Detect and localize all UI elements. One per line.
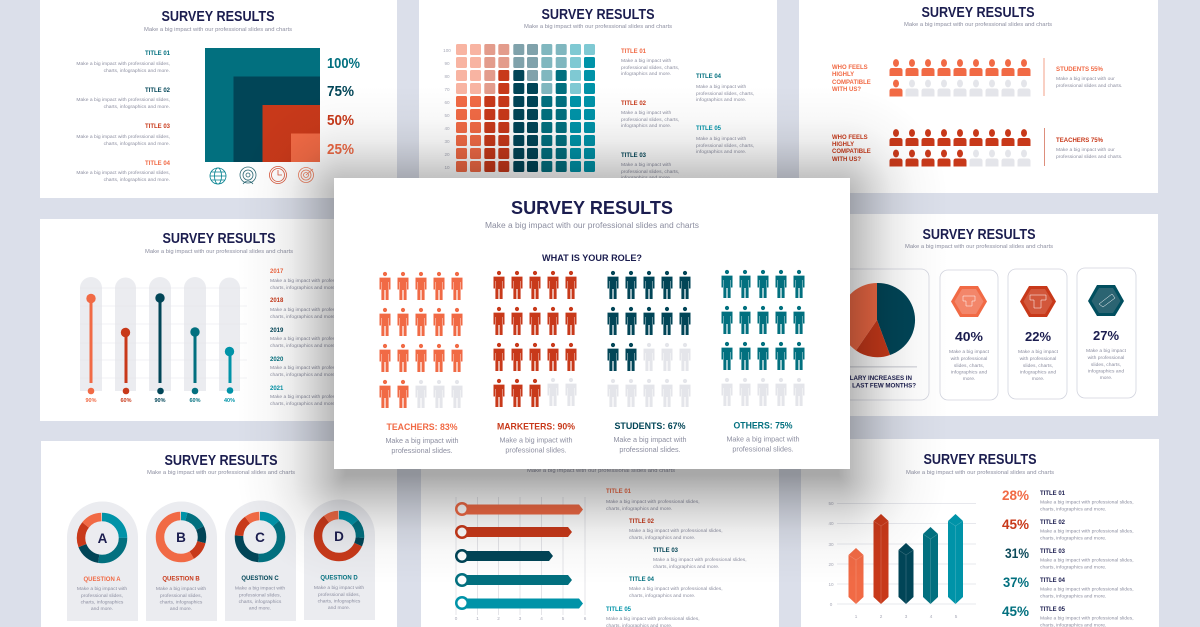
- value labels: lollipop chart: 60%: [189, 398, 201, 404]
- percent labels: column chart: 31%: [1005, 545, 1029, 561]
- arch card: question C: charts, infographics: [239, 599, 282, 605]
- subtitle: compatibility slide: Make a big impact with our professional slides and charts: [904, 22, 1052, 28]
- text list: column chart titles: TITLE 05: [1040, 607, 1066, 613]
- axis labels: waffle chart: 10: [444, 165, 450, 170]
- text list: staggered titles 01 to 05: TITLE 01: [606, 489, 632, 495]
- text list: titles 01 to 04: Make a big impact with professional slides,: [76, 61, 170, 67]
- chart: horizontal arrow bars: 0: [455, 616, 458, 621]
- arch card: question D: professional slides,: [318, 592, 360, 598]
- chart: horizontal arrow bars: 4: [540, 616, 543, 621]
- text list: titles 01 to 05: Make a big impact with: [621, 110, 671, 116]
- chart: hexagonal columns: 5: [955, 614, 958, 619]
- caption: students: [613, 421, 687, 454]
- chart: hexagonal columns: 30: [828, 542, 834, 547]
- text list: titles 01 to 05: infographics and more.: [696, 97, 746, 103]
- question label: teachers: COMPATIBLE: [832, 149, 871, 155]
- caption: students: professional slides.: [619, 445, 681, 454]
- text list: staggered titles 01 to 05: TITLE 05: [606, 607, 632, 613]
- arch card: question B: charts, infographics: [160, 600, 203, 606]
- text list: column chart titles: Make a big impact with professional slides,: [1040, 500, 1134, 506]
- callout: students 55%: STUDENTS 55%: [1056, 67, 1104, 73]
- chart: waffle grid: [456, 44, 595, 172]
- text list: years 2017 to 2021: charts, infographics and more.: [270, 343, 336, 349]
- text list: column chart titles: charts, infographics and more.: [1040, 594, 1106, 600]
- text list: staggered titles 01 to 05: Make a big impact with professional slides,: [653, 557, 747, 563]
- text list: staggered titles 01 to 05: charts, infographics and more.: [653, 564, 719, 570]
- panel: compatibility pictogram slide: [799, 0, 1158, 193]
- axis labels: waffle chart: 70: [444, 87, 450, 92]
- text list: titles 01 to 05: professional slides, charts,: [696, 143, 754, 149]
- arch card: question C: and more.: [249, 606, 271, 612]
- card: 27%: infographics and: [1088, 368, 1124, 374]
- panel: nested squares slide: [40, 0, 397, 198]
- axis labels: waffle chart: 50: [444, 113, 450, 118]
- heading: column chart slide: SURVEY RESULTS: [924, 452, 1037, 468]
- subtitle: hexagon cards slide: Make a big impact with our professional slides and charts: [905, 244, 1053, 250]
- text list: staggered titles 01 to 05: Make a big impact with professional slides,: [606, 499, 700, 505]
- arch card: question B: and more.: [170, 606, 192, 612]
- text list: column chart titles: TITLE 02: [1040, 520, 1066, 526]
- card: 27%: Make a big impact: [1086, 348, 1127, 354]
- pictogram: teachers 75%: [890, 129, 1030, 166]
- caption: marketers: professional slides.: [505, 446, 567, 454]
- callout: students 55%: Make a big impact with our: [1056, 76, 1115, 82]
- text list: titles 01 to 05: Make a big impact with: [621, 58, 671, 64]
- value labels: lollipop chart: 90%: [85, 398, 97, 404]
- pictogram: students 67%: [608, 271, 690, 407]
- axis labels: waffle chart: 40: [444, 126, 450, 131]
- caption: marketers: Make a big impact with: [499, 436, 573, 444]
- arch card: question A: and more.: [91, 606, 113, 612]
- chart: horizontal arrow bars: 1: [476, 616, 479, 621]
- callout: students 55%: professional slides and charts.: [1056, 83, 1122, 89]
- text list: staggered titles 01 to 05: TITLE 02: [629, 519, 655, 525]
- card: 27%: with professional: [1088, 355, 1124, 361]
- caption: teachers: [385, 422, 459, 455]
- axis labels: waffle chart: [443, 48, 451, 170]
- text list: titles 01 to 04: TITLE 01: [145, 51, 171, 57]
- text list: staggered titles 01 to 05: charts, infographics and more.: [629, 593, 695, 599]
- heading: lollipop slide: SURVEY RESULTS: [162, 231, 276, 247]
- question heading: what is your role: WHAT IS YOUR ROLE?: [542, 253, 642, 263]
- pictogram: others 75%: [722, 270, 804, 406]
- text list: column chart titles: charts, infographics and more.: [1040, 564, 1106, 570]
- subtitle: nested squares slide: Make a big impact with our professional slides and charts: [144, 27, 292, 33]
- percent labels: nested squares: 100%: [327, 55, 360, 72]
- text list: titles 01 to 04: Make a big impact with professional slides,: [76, 97, 170, 103]
- text list: titles 01 to 05: professional slides, charts,: [621, 169, 679, 175]
- axis labels: waffle chart: 30: [444, 139, 450, 144]
- text list: years 2017 to 2021: Make a big impact with professional slides,: [270, 365, 364, 371]
- text list: years 2017 to 2021: charts, infographics and more.: [270, 372, 336, 378]
- text list: titles 01 to 05: Make a big impact with: [696, 84, 746, 90]
- heading: hexagon cards slide: SURVEY RESULTS: [922, 227, 1036, 243]
- heading: donut slide: SURVEY RESULTS: [164, 453, 278, 469]
- card: 22%: Make a big impact: [1018, 349, 1059, 355]
- text list: years 2017 to 2021: 2017: [270, 269, 284, 275]
- arch card: question A: professional slides,: [81, 593, 123, 599]
- chart: horizontal arrow bars: 2: [497, 616, 500, 621]
- caption: others: [726, 420, 800, 454]
- card: 40%: 40%: [955, 329, 983, 344]
- caption: others: Make a big impact with: [726, 434, 800, 444]
- arch card: question A: A: [98, 531, 108, 546]
- arch card: question A: Make a big impact with: [77, 586, 127, 592]
- icons: globe, target person, clock, bullseye: [210, 166, 314, 184]
- text list: years 2017 to 2021: 2019: [270, 328, 284, 334]
- text list: years 2017 to 2021: 2020: [270, 357, 284, 363]
- percent labels: column chart: 37%: [1003, 574, 1030, 590]
- caption: marketers: MARKETERS: 90%: [497, 422, 575, 432]
- chart: hexagonal columns: 40: [828, 521, 834, 526]
- percent labels: column chart: [1002, 487, 1030, 619]
- text list: column chart titles: [1040, 491, 1134, 627]
- text list: years 2017 to 2021: charts, infographics and more.: [270, 285, 336, 291]
- percent labels: column chart: 45%: [1002, 516, 1030, 532]
- text list: column chart titles: Make a big impact with professional slides,: [1040, 586, 1134, 592]
- arch card: question C: QUESTION C: [241, 576, 279, 582]
- text list: titles 01 to 05: TITLE 02: [621, 101, 647, 107]
- question label: teachers: [832, 135, 871, 163]
- text list: staggered titles 01 to 05: Make a big impact with professional slides,: [629, 586, 723, 592]
- card: 22%: with professional: [1020, 356, 1056, 362]
- callout: teachers 75%: TEACHERS 75%: [1056, 138, 1104, 144]
- arch card: question C: Make a big impact with: [235, 586, 285, 592]
- card: 27%: [1077, 268, 1136, 398]
- text list: titles 01 to 05: Make a big impact with: [696, 136, 746, 142]
- text list: titles 01 to 04: TITLE 02: [145, 88, 171, 94]
- caption: marketers: [497, 422, 575, 454]
- caption: others: OTHERS: 75%: [734, 420, 792, 430]
- card: 27%: 27%: [1093, 328, 1119, 343]
- text list: titles 01 to 05: infographics and more.: [621, 123, 671, 129]
- question label: students: COMPATIBLE: [832, 80, 871, 86]
- question label: students: HIGHLY: [832, 72, 854, 78]
- text list: titles 01 to 05: infographics and more.: [696, 149, 746, 155]
- heading: central card: SURVEY RESULTS: [511, 197, 673, 218]
- text list: staggered titles 01 to 05: TITLE 04: [629, 577, 655, 583]
- arch card: question B: B: [176, 530, 186, 545]
- card: salary pie chart: SALARY INCREASES IN: [841, 375, 913, 382]
- question label: teachers: HIGHLY: [832, 142, 854, 148]
- text list: titles 01 to 05: professional slides, charts,: [696, 91, 754, 97]
- arch card: question A: QUESTION A: [83, 577, 121, 583]
- chart: horizontal arrow bars: [455, 497, 587, 621]
- percent labels: nested squares: [327, 55, 360, 158]
- arch card: question A: charts, infographics: [81, 600, 124, 606]
- card: 40%: with professional: [951, 356, 987, 362]
- percent labels: nested squares: 75%: [327, 83, 354, 100]
- arch card: question D: [304, 500, 375, 620]
- question label: students: WHO FEELS: [832, 65, 868, 71]
- caption: students: STUDENTS: 67%: [614, 421, 686, 431]
- chart: hexagonal columns: 0: [830, 602, 833, 607]
- chart: hexagonal columns: 50: [828, 501, 834, 506]
- arch card: question B: QUESTION B: [162, 576, 200, 582]
- arch card: question C: [225, 500, 296, 621]
- text list: titles 01 to 04: charts, infographics and more.: [104, 141, 170, 147]
- arch card: question D: Make a big impact with: [314, 585, 364, 591]
- panel: arrow bars slide: [421, 440, 779, 627]
- callout: teachers 75%: professional slides and charts.: [1056, 154, 1122, 160]
- subtitle: central card: Make a big impact with our professional slides and charts: [485, 221, 699, 230]
- text list: titles 01 to 04: Make a big impact with professional slides,: [76, 134, 170, 140]
- pictogram: teachers 83%: [380, 272, 462, 408]
- text list: titles 01 to 05: TITLE 04: [696, 74, 722, 80]
- text list: years 2017 to 2021: Make a big impact with professional slides,: [270, 394, 364, 400]
- axis labels: waffle chart: 90: [444, 61, 450, 66]
- question label: students: WITH US?: [832, 87, 861, 93]
- caption: teachers: TEACHERS: 83%: [386, 422, 458, 432]
- arch card: question A: [67, 502, 138, 621]
- panel: waffle chart slide: [419, 0, 777, 181]
- subtitle: waffle chart slide: Make a big impact with our professional slides and charts: [524, 24, 672, 30]
- percent labels: nested squares: 50%: [327, 112, 354, 129]
- question label: teachers: WITH US?: [832, 157, 861, 163]
- chart: horizontal arrow bars: 6: [584, 616, 587, 621]
- text list: titles 01 to 05: TITLE 01: [621, 49, 647, 55]
- axis labels: waffle chart: 20: [444, 152, 450, 157]
- card: salary pie chart: [790, 269, 929, 400]
- card: 40%: slides, charts,: [954, 363, 984, 369]
- text list: titles 01 to 04: TITLE 04: [145, 161, 171, 167]
- text list: titles 01 to 05: professional slides, charts,: [621, 65, 679, 71]
- chart: hexagonal columns: 4: [930, 614, 933, 619]
- arch card: question D: and more.: [328, 605, 350, 611]
- text list: years 2017 to 2021: charts, infographics and more.: [270, 314, 336, 320]
- subtitle: column chart slide: Make a big impact with our professional slides and charts: [906, 470, 1054, 476]
- value labels: lollipop chart: 40%: [224, 398, 235, 404]
- chart: hexagonal columns: 10: [828, 582, 834, 587]
- chart: hexagonal columns: 3: [905, 614, 908, 619]
- text list: column chart titles: Make a big impact with professional slides,: [1040, 528, 1134, 534]
- arch card: question B: Make a big impact with: [156, 586, 206, 592]
- text list: titles 01 to 04: [76, 51, 171, 183]
- card: 22%: infographics and: [1020, 370, 1056, 376]
- text list: titles 01 to 04: TITLE 03: [145, 124, 171, 130]
- callout: teachers 75%: Make a big impact with our: [1056, 147, 1115, 153]
- text list: column chart titles: TITLE 01: [1040, 491, 1066, 497]
- caption: teachers: Make a big impact with: [385, 436, 459, 445]
- arch card: question B: [146, 502, 217, 621]
- caption: students: Make a big impact with: [613, 435, 687, 444]
- chart: horizontal arrow bars: 5: [562, 616, 565, 621]
- card: 40%: Make a big impact: [949, 349, 990, 355]
- text list: years 2017 to 2021: Make a big impact with professional slides,: [270, 307, 364, 313]
- axis labels: waffle chart: 80: [444, 74, 450, 79]
- question label: teachers: WHO FEELS: [832, 135, 868, 141]
- panel: central card, what is your role: [334, 178, 850, 469]
- percent labels: column chart: 45%: [1002, 603, 1030, 619]
- text list: titles 01 to 04: charts, infographics and more.: [104, 68, 170, 74]
- text list: years 2017 to 2021: charts, infographics and more.: [270, 401, 336, 407]
- text list: titles 01 to 05: Make a big impact with: [621, 162, 671, 168]
- subtitle: arrow bars slide: Make a big impact with our professional slides and charts: [527, 468, 675, 474]
- text list: staggered titles 01 to 05: charts, infographics and more.: [629, 535, 695, 541]
- text list: years 2017 to 2021: 2018: [270, 298, 284, 304]
- text list: column chart titles: Make a big impact with professional slides,: [1040, 558, 1134, 564]
- heading: waffle chart slide: SURVEY RESULTS: [542, 7, 655, 23]
- panel: hexagon cards slide: [790, 214, 1158, 416]
- panel: donut questions slide: [41, 441, 397, 627]
- chart: horizontal arrow bars: 3: [519, 616, 522, 621]
- card: 40%: infographics and: [951, 370, 987, 376]
- arch card: question D: charts, infographics: [318, 598, 361, 604]
- text list: staggered titles 01 to 05: charts, infographics and more.: [606, 506, 672, 512]
- card: 27%: slides, charts,: [1091, 362, 1121, 368]
- callout: students 55%: [1056, 67, 1122, 89]
- pictogram: students 55%: [890, 59, 1030, 96]
- chart: hexagonal columns: 1: [855, 614, 858, 619]
- text list: column chart titles: TITLE 03: [1040, 549, 1066, 555]
- subtitle: donut slide: Make a big impact with our professional slides and charts: [147, 470, 295, 476]
- text list: column chart titles: charts, infographics and more.: [1040, 536, 1106, 542]
- text list: titles 01 to 05: infographics and more.: [621, 71, 671, 77]
- card: 40%: more.: [963, 376, 975, 382]
- text list: column chart titles: Make a big impact with professional slides,: [1040, 616, 1134, 622]
- percent labels: column chart: 28%: [1002, 487, 1030, 503]
- heading: nested squares slide: SURVEY RESULTS: [162, 9, 275, 25]
- percent labels: nested squares: 25%: [327, 141, 354, 158]
- arch card: question C: professional slides,: [239, 592, 281, 598]
- text list: column chart titles: TITLE 04: [1040, 578, 1066, 584]
- question label: students: [832, 65, 871, 93]
- text list: titles 01 to 04: Make a big impact with professional slides,: [76, 170, 170, 176]
- text list: titles 01 to 05: infographics and more.: [621, 175, 671, 181]
- text list: staggered titles 01 to 05: [606, 489, 747, 627]
- panel: lollipop chart slide: [40, 219, 364, 421]
- text list: titles 01 to 05: TITLE 05: [696, 126, 722, 132]
- chart: hexagonal columns: [828, 501, 976, 619]
- card: salary pie chart: THE LAST FEW MONTHS?: [838, 382, 916, 390]
- arch card: question D: QUESTION D: [320, 576, 358, 582]
- text list: titles 01 to 05: TITLE 03: [621, 153, 647, 159]
- text list: years 2017 to 2021: [270, 269, 364, 407]
- text list: titles 01 to 04: charts, infographics and more.: [104, 104, 170, 110]
- arch card: question D: D: [334, 529, 344, 544]
- text list: years 2017 to 2021: Make a big impact with professional slides,: [270, 336, 364, 342]
- panel: hexagonal column chart slide: [801, 439, 1159, 627]
- callout: teachers 75%: [1056, 138, 1122, 160]
- value labels: lollipop chart: 60%: [120, 398, 132, 404]
- text list: years 2017 to 2021: Make a big impact with professional slides,: [270, 278, 364, 284]
- card: 40%: [940, 270, 998, 400]
- card: 22%: 22%: [1025, 329, 1051, 344]
- text list: years 2017 to 2021: 2021: [270, 386, 284, 392]
- card: 27%: more.: [1100, 375, 1112, 381]
- text list: staggered titles 01 to 05: Make a big impact with professional slides,: [606, 616, 700, 622]
- text list: titles 01 to 05: [621, 49, 754, 181]
- arch card: question B: professional slides,: [160, 593, 202, 599]
- value labels: lollipop chart: [85, 398, 235, 404]
- card: 22%: slides, charts,: [1023, 363, 1053, 369]
- text list: staggered titles 01 to 05: Make a big impact with professional slides,: [629, 528, 723, 534]
- value labels: lollipop chart: 90%: [154, 398, 166, 404]
- card: 22%: [1008, 269, 1067, 399]
- caption: others: professional slides.: [732, 444, 794, 454]
- text list: titles 01 to 04: charts, infographics and more.: [104, 177, 170, 183]
- chart: nested squares: [205, 48, 320, 162]
- caption: teachers: professional slides.: [391, 446, 453, 455]
- heading: compatibility slide: SURVEY RESULTS: [922, 5, 1035, 21]
- pictogram: marketers 90%: [494, 271, 576, 407]
- text list: staggered titles 01 to 05: TITLE 03: [653, 548, 679, 554]
- axis labels: waffle chart: 100: [443, 48, 451, 53]
- arch card: question C: C: [255, 530, 265, 545]
- subtitle: lollipop slide: Make a big impact with our professional slides and charts: [145, 249, 293, 255]
- chart: hexagonal columns: 2: [880, 614, 883, 619]
- chart: hexagonal columns: 20: [828, 562, 834, 567]
- card: 22%: more.: [1032, 376, 1044, 382]
- axis labels: waffle chart: 60: [444, 100, 450, 105]
- text list: titles 01 to 05: professional slides, charts,: [621, 117, 679, 123]
- text list: column chart titles: charts, infographics and more.: [1040, 506, 1106, 512]
- chart: lollipop columns: [80, 277, 247, 394]
